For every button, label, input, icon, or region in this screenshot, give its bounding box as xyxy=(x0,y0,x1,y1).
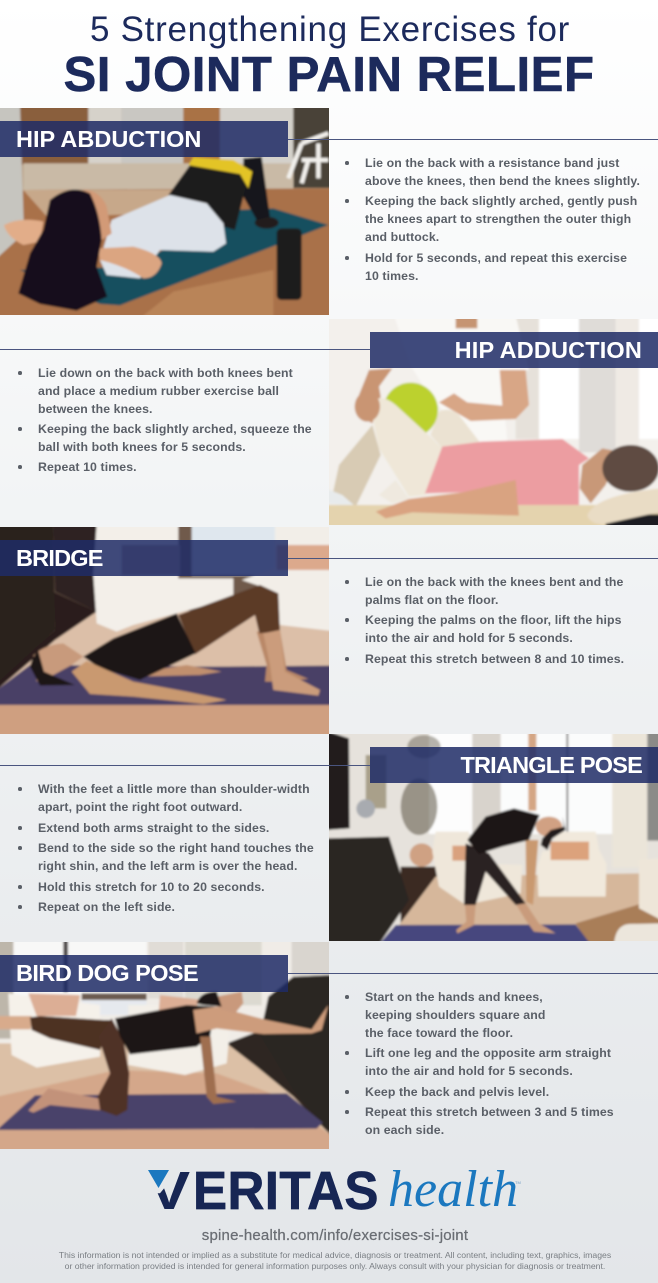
panel: bridge xyxy=(0,527,658,734)
instructions xyxy=(345,575,624,666)
heading: triangle pose: TRIANGLE POSE xyxy=(460,752,642,778)
rule xyxy=(288,139,658,140)
rule xyxy=(0,349,370,350)
heading: hip adduction: HIP ADDUCTION xyxy=(455,337,642,363)
bullet 2: into the air and hold for 5 seconds. xyxy=(365,1064,573,1078)
bullet 2: ball with both knees for 5 seconds. xyxy=(38,440,246,454)
trademark: TM xyxy=(515,1180,521,1185)
photo: triangle pose in living room xyxy=(329,734,658,941)
footer xyxy=(58,1160,611,1270)
bullet 3: Repeat this stretch between 8 and 10 times. xyxy=(365,652,624,666)
instructions xyxy=(345,156,640,283)
title line 1: 5 Strengthening Exercises for xyxy=(90,10,570,49)
heading: hip abduction: HIP ABDUCTION xyxy=(16,126,201,152)
instructions xyxy=(18,782,314,914)
photo: bird dog pose on mat xyxy=(0,942,329,1149)
bullet 3: Repeat 10 times. xyxy=(38,460,137,474)
bullet 2 xyxy=(365,192,637,247)
bullet 2 xyxy=(365,611,622,647)
logo: Veritas Health xyxy=(148,1160,521,1220)
rule xyxy=(288,973,658,974)
bullet 4: on each side. xyxy=(365,1123,444,1137)
bullet 4 xyxy=(365,1103,614,1139)
bullet 3: 10 times. xyxy=(365,269,419,283)
bullet 1 xyxy=(38,364,293,419)
bullet 1 xyxy=(365,988,545,1043)
photo: therapist with ball between knees xyxy=(329,319,658,525)
bullet 1 xyxy=(365,573,623,609)
bullet 4: Hold this stretch for 10 to 20 seconds. xyxy=(38,880,265,894)
photo: woman with resistance band xyxy=(0,108,329,315)
panel: hip adduction xyxy=(0,319,658,525)
title line 2: SI JOINT PAIN RELIEF xyxy=(63,47,595,102)
bullet 2: and buttock. xyxy=(365,230,439,244)
bullet 2 xyxy=(365,1044,611,1080)
bullet 2: the knees apart to strengthen the outer thigh xyxy=(365,212,631,226)
logo wordmark: health: health xyxy=(388,1160,518,1218)
logo mark: blue triangle with notch xyxy=(148,1170,169,1194)
title xyxy=(63,10,595,102)
bullet 1: Lie on the back with a resistance band just xyxy=(365,156,619,170)
logo wordmark: VERITAS: V xyxy=(148,1162,190,1220)
bullet 1 xyxy=(365,154,640,190)
bullet 1: Lie on the back with the knees bent and the xyxy=(365,575,623,589)
bullet 3: right shin, and the left arm is over the head. xyxy=(38,859,297,873)
bullet 3 xyxy=(365,249,627,285)
bullet 2: Keeping the palms on the floor, lift the hips xyxy=(365,613,622,627)
url: spine-health.com/info/exercises-si-joint xyxy=(202,1227,468,1244)
heading: bird dog pose: BIRD DOG POSE xyxy=(16,960,198,986)
bullet 2: Keeping the back slightly arched, squeeze the xyxy=(38,422,312,436)
bullet 2: Keeping the back slightly arched, gently push xyxy=(365,194,637,208)
bullet 1: and place a medium rubber exercise ball xyxy=(38,384,279,398)
logo wordmark: VERITAS: ERITAS xyxy=(193,1162,379,1220)
bullet 1: Start on the hands and knees, xyxy=(365,990,543,1004)
panel: hip abduction xyxy=(0,108,658,315)
bullet 3: Bend to the side so the right hand touches the xyxy=(38,841,314,855)
bullet 3: Hold for 5 seconds, and repeat this exercise xyxy=(365,251,627,265)
bullet 1: apart, point the right foot outward. xyxy=(38,800,242,814)
bullet 3 xyxy=(38,839,314,875)
bullet 1: the face toward the floor. xyxy=(365,1026,513,1040)
heading: hip abduction xyxy=(0,121,288,157)
bullet 1: palms flat on the floor. xyxy=(365,593,499,607)
rule xyxy=(288,558,658,559)
bullet 5: Repeat on the left side. xyxy=(38,900,175,914)
bullet 4: Repeat this stretch between 3 and 5 times xyxy=(365,1105,614,1119)
bullet 2: Extend both arms straight to the sides. xyxy=(38,821,269,835)
instructions xyxy=(345,990,614,1137)
heading: bridge xyxy=(0,540,288,576)
bullet 1: between the knees. xyxy=(38,402,153,416)
heading: triangle pose xyxy=(370,747,658,783)
heading: bird dog pose xyxy=(0,955,288,992)
bullet 1: keeping shoulders square and xyxy=(365,1008,545,1022)
panel: triangle pose xyxy=(0,734,658,941)
disclaimer: This information is not intended or implied as a substitute for medical advice, diagnosis or treatment. All content, including text, graphics, images xyxy=(59,1250,611,1260)
bullet 2: into the air and hold for 5 seconds. xyxy=(365,631,573,645)
bullet 1: With the feet a little more than shoulder-width xyxy=(38,782,310,796)
disclaimer: or other information provided is intended for general information purposes only. Always consult with your physician for diagnosis or treatment. xyxy=(65,1260,605,1270)
photo: bridge pose on mat xyxy=(0,527,329,734)
bullet 3: Keep the back and pelvis level. xyxy=(365,1085,549,1099)
rule xyxy=(0,765,370,766)
heading: hip adduction xyxy=(370,332,658,368)
heading: bridge: BRIDGE xyxy=(16,545,103,571)
bullet 1: Lie down on the back with both knees bent xyxy=(38,366,293,380)
panel: bird dog pose xyxy=(0,942,658,1149)
bullet 1 xyxy=(38,780,310,816)
bullet 2: Lift one leg and the opposite arm straight xyxy=(365,1046,611,1060)
bullet 1: above the knees, then bend the knees slightly. xyxy=(365,174,640,188)
disclaimer xyxy=(58,1250,611,1270)
bullet 2 xyxy=(38,420,312,456)
instructions xyxy=(18,366,312,474)
